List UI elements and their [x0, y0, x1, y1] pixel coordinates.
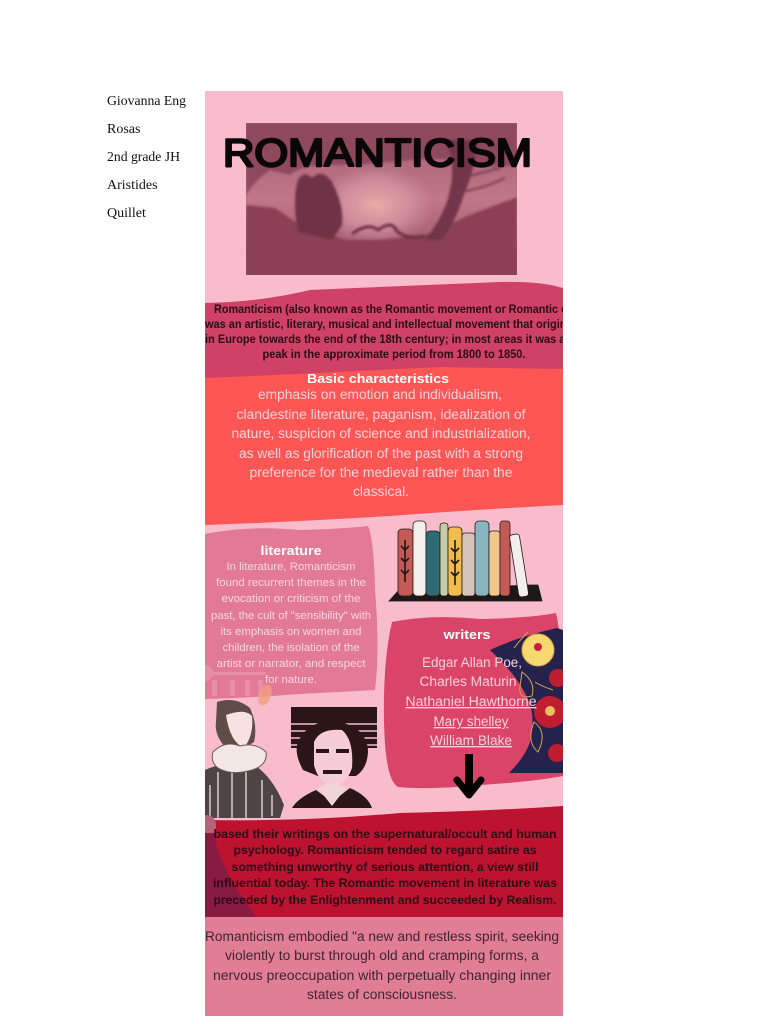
title: ROMANTICISM	[223, 132, 532, 175]
author credits: 2nd grade JH	[107, 150, 180, 165]
heading: basic characteristics: Basic characteristics	[307, 372, 449, 386]
supernatural text: based their writings on the supernatural/occult and human	[214, 829, 556, 841]
literature text: evocation or criticism of the	[222, 593, 360, 605]
quote text: violently to burst through old and cramping forms, a	[225, 948, 539, 963]
quote text	[205, 929, 559, 1002]
literature text	[211, 561, 371, 686]
writers list: William Blake	[430, 733, 512, 748]
quote text: Romanticism embodied "a new and restless spirit, seeking	[205, 929, 559, 944]
supernatural text	[213, 829, 557, 907]
literature text: for nature.	[265, 674, 317, 686]
decoration: floral dress	[490, 628, 567, 773]
intro text: in Europe towards the end of the 18th century; in most areas it was at its	[205, 334, 585, 346]
band: intro	[204, 282, 589, 380]
heading: literature: literature	[260, 544, 322, 558]
writers list	[406, 655, 536, 748]
quote text: states of consciousness.	[307, 987, 457, 1002]
characteristics text: as well as glorification of the past with a strong	[239, 446, 523, 461]
intro text: Romanticism (also known as the Romantic movement or Romantic era)	[214, 304, 581, 316]
writers list: Edgar Allan Poe,	[422, 655, 522, 670]
characteristics text: emphasis on emotion and individualism,	[258, 387, 502, 402]
panel: writers	[384, 613, 567, 788]
decoration: faded figure	[205, 815, 256, 917]
heading: writers: writers	[442, 628, 491, 642]
characteristics text: preference for the medieval rather than the	[250, 465, 512, 480]
writers list: Mary shelley	[434, 714, 509, 729]
author credits: Quillet	[107, 206, 146, 221]
literature text: found recurrent themes in the	[216, 577, 366, 589]
supernatural text: psychology. Romanticism tended to regard satire as	[234, 845, 536, 857]
icon: books on a shelf	[389, 521, 542, 601]
characteristics text	[232, 387, 530, 499]
panel: supernatural band	[205, 806, 563, 917]
infographic panel background	[205, 91, 563, 1016]
panel: literature	[197, 526, 378, 707]
decoration: orange leaf	[258, 684, 272, 706]
intro text: peak in the approximate period from 1800 to 1850.	[262, 349, 526, 361]
supernatural text: influential today. The Romantic movement in literature was	[213, 878, 557, 890]
arrow: down	[457, 754, 481, 796]
author credits: Aristides	[107, 178, 158, 193]
decoration: faded temple	[205, 665, 266, 696]
literature text: In literature, Romanticism	[226, 561, 356, 573]
author credits	[107, 94, 186, 221]
portrait: Edgar Allan Poe	[291, 707, 377, 808]
literature text: past, the cult of "sensibility" with	[211, 610, 371, 622]
literature text: children, the isolation of the	[222, 642, 360, 654]
panel: quote	[205, 917, 563, 1016]
portrait: ruffled collar man	[205, 700, 284, 818]
intro text	[204, 304, 589, 361]
writers list: Charles Maturin	[420, 674, 516, 689]
author credits: Giovanna Eng	[107, 94, 186, 109]
characteristics text: nature, suspicion of science and industrialization,	[232, 426, 530, 441]
author credits: Rosas	[107, 122, 140, 137]
supernatural text: preceded by the Enlightenment and succeeded by Realism.	[214, 895, 556, 907]
characteristics text: clandestine literature, paganism, idealization of	[236, 407, 526, 422]
literature text: artist or narrator, and respect	[216, 658, 366, 670]
characteristics text: classical.	[353, 484, 409, 499]
panel: basic characteristics	[205, 367, 563, 525]
supernatural text: something unworthy of serious attention, a view still	[232, 862, 538, 874]
intro text: was an artistic, literary, musical and intellectual movement that originated	[204, 319, 589, 331]
writers list: Nathaniel Hawthorne	[406, 694, 536, 709]
literature text: its emphasis on women and	[220, 626, 362, 638]
quote text: nervous preoccupation with perpetually changing inner	[213, 968, 552, 983]
image: moonlit painting	[246, 123, 517, 275]
